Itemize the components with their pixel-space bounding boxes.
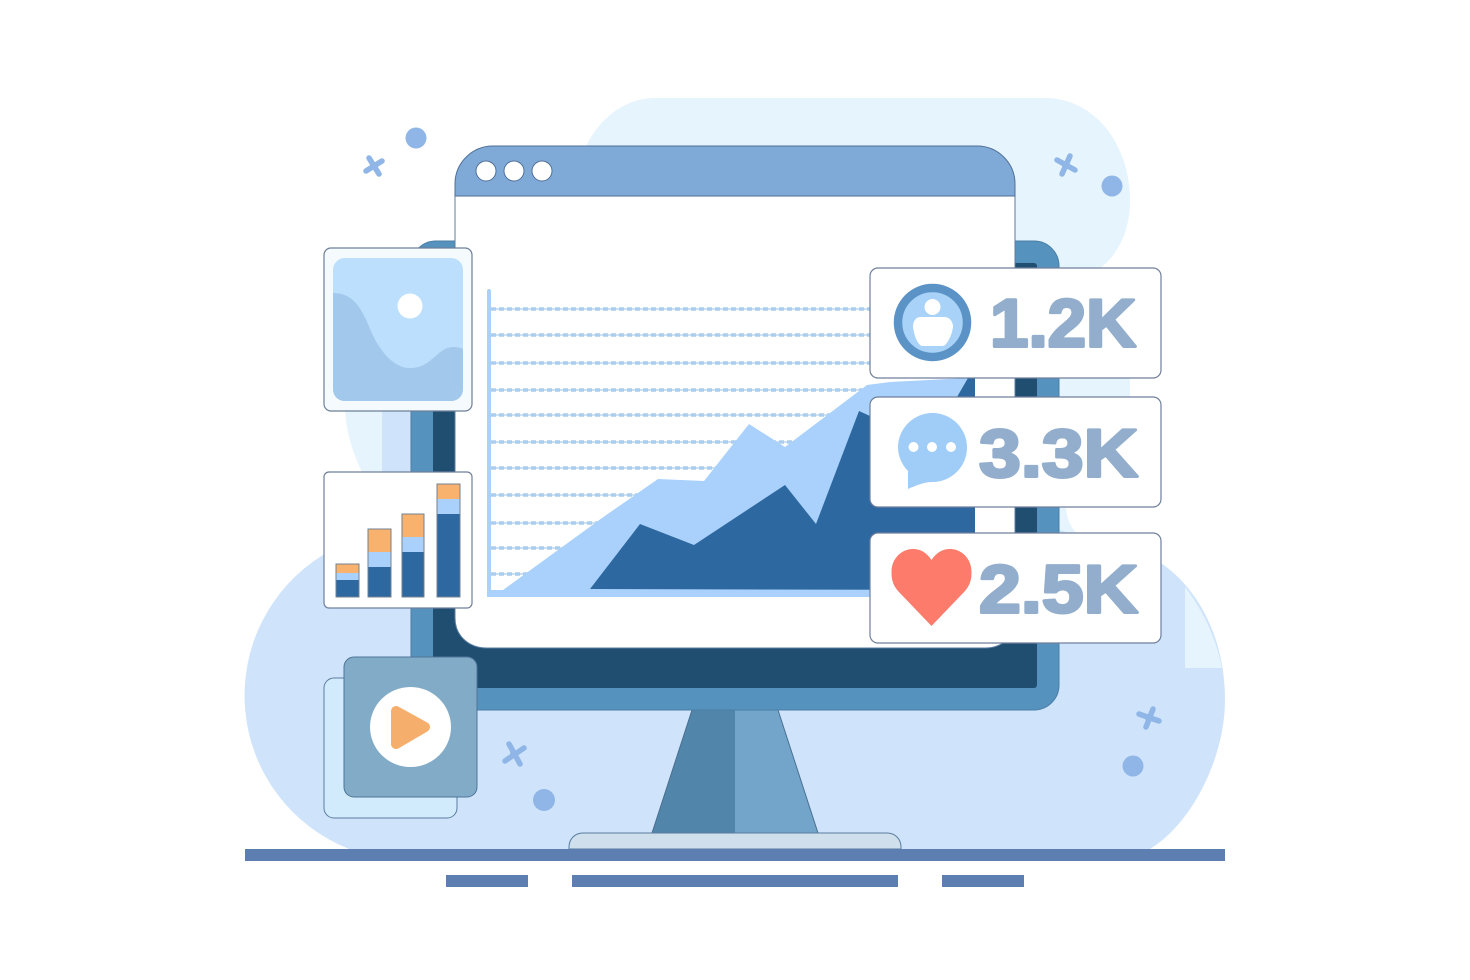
- value: 1.2K: 1.2K: [990, 286, 1136, 362]
- value: 2.5K: 2.5K: [979, 552, 1138, 628]
- chart axes: [487, 289, 975, 597]
- light area series: [503, 378, 968, 597]
- floor line: [245, 849, 1225, 861]
- decorative dots: [406, 128, 1144, 811]
- bar 4: [437, 484, 460, 597]
- picture sun: [398, 294, 422, 318]
- icon: heart: [892, 549, 972, 626]
- background accent rectangle left: [382, 410, 412, 472]
- floor dashes: [446, 875, 1024, 887]
- browser window: [455, 146, 1015, 648]
- monitor screen: [433, 263, 1037, 688]
- card frame: [870, 268, 1161, 378]
- window title bar: [455, 146, 1015, 196]
- decorative crosses: [366, 156, 1159, 764]
- stat card: comments: [870, 397, 1161, 507]
- stat card: likes: [870, 533, 1161, 643]
- bar 2: [368, 529, 391, 597]
- monitor base: [569, 833, 901, 849]
- stat card: followers: [870, 268, 1161, 378]
- monitor stand: [652, 710, 818, 833]
- value: 3.3K: 3.3K: [979, 416, 1138, 492]
- picture background: [333, 258, 463, 401]
- image card: [324, 248, 472, 411]
- monitor: [411, 241, 1059, 849]
- bar chart card: [324, 472, 472, 608]
- video card: [324, 657, 477, 818]
- front card: [344, 657, 477, 797]
- bar 1: [336, 564, 359, 597]
- background accent rectangle right: [1185, 587, 1222, 668]
- picture hills: [333, 293, 463, 401]
- play triangle: [396, 711, 425, 744]
- background blob: bottom blue: [245, 530, 1225, 849]
- window control dots: [476, 161, 552, 181]
- window body: [455, 190, 1015, 648]
- card frame: [870, 533, 1161, 643]
- play button circle: [370, 687, 451, 767]
- bar 3: [402, 514, 424, 597]
- area chart: [487, 289, 975, 597]
- back card: [324, 678, 457, 818]
- icon: speech bubble: [898, 413, 967, 489]
- card frame: [870, 397, 1161, 507]
- dark area series: [590, 378, 975, 590]
- card frame: [324, 248, 472, 411]
- card frame: [324, 472, 472, 608]
- background blob: top light: [345, 98, 1130, 540]
- chart grid lines: [491, 309, 872, 574]
- icon: user: [898, 288, 967, 357]
- monitor frame: [411, 241, 1059, 710]
